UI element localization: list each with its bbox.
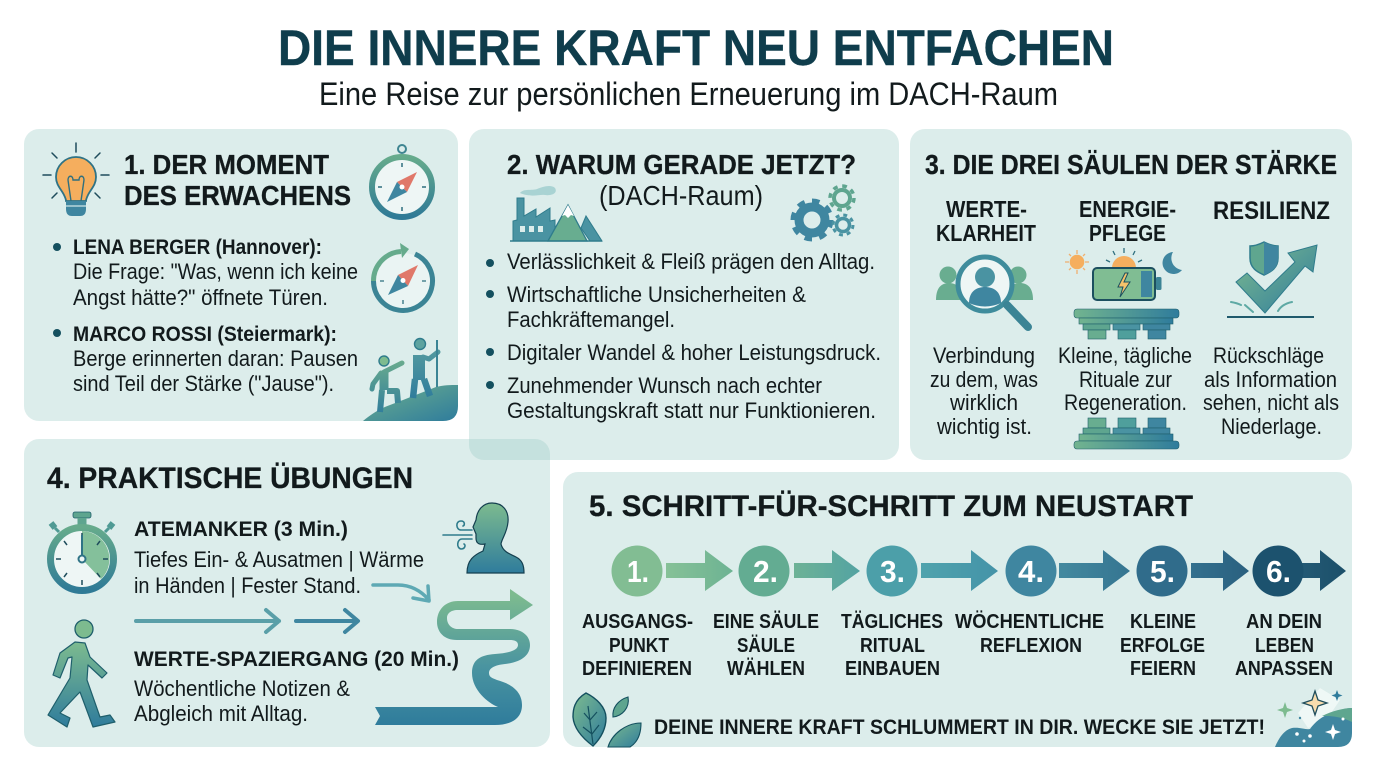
heading 1: DES ERWACHENS [124,180,351,211]
step 4: REFLEXION [980,635,1082,657]
step 5 [1120,546,1205,680]
column: Resilienz: RESILIENZ [1213,197,1330,225]
heading 2: (DACH-Raum) [599,180,763,211]
column: Energie-Pflege [1058,196,1192,449]
step 1: PUNKT [609,635,669,657]
heading 2: 2. WARUM GERADE JETZT? [507,149,856,180]
icon: gears [793,186,854,239]
step 6: 6. [1266,554,1291,589]
bullet list: Gestaltungskraft statt nur Funktionieren. [507,398,876,423]
text: Marco Rossi: MARCO ROSSI (Steiermark): [73,323,337,346]
step 2: WÄHLEN [727,657,805,680]
column: Resilienz [1203,197,1339,439]
heading 1: 1. DER MOMENT [124,149,329,180]
step 2: 2. [753,554,778,589]
panel 5 background [563,472,1352,747]
bullet list: Zunehmender Wunsch nach echter [507,373,822,398]
column: Werte-Klarheit: wirklich [949,390,1018,415]
text: Lena Berger: Angst hätte?" öffnete Türen. [73,285,328,310]
icon: walking person [48,620,115,727]
step 5: ERFOLGE [1120,635,1205,657]
panel 4 background [24,439,550,747]
column: Energie-Pflege: Rituale zur [1079,367,1172,392]
column: Resilienz: sehen, nicht als [1203,390,1339,415]
step 5: FEIERN [1130,658,1196,680]
text: Lena Berger: LENA BERGER (Hannover): [73,236,322,259]
icon: compass with arrow [373,243,432,310]
column: Werte-Klarheit: wichtig ist. [936,414,1032,439]
column: Resilienz: Niederlage. [1221,414,1322,439]
text: Marco Rossi [53,323,358,396]
icon: shield, check and rising arrow [1227,242,1317,317]
bullet list: Digitaler Wandel & hoher Leistungsdruck. [507,340,881,365]
title: DIE INNERE KRAFT NEU ENTFACHEN [278,20,1114,76]
column: Energie-Pflege: PFLEGE [1089,220,1166,246]
step 4: WÖCHENTLICHE [955,610,1104,633]
icon: compass [372,145,432,217]
heading 5: 5. SCHRITT-FÜR-SCHRITT ZUM NEUSTART [589,490,1193,523]
panel: 4 Praktische Übungen [24,439,550,747]
column: Energie-Pflege: Kleine, tägliche [1058,343,1192,368]
icon: hikers on a hill [363,338,458,421]
step 2 [713,546,819,680]
column: Werte-Klarheit: WERTE- [946,196,1027,222]
bullet list [486,249,881,423]
subtitle: Eine Reise zur persönlichen Erneuerung im DACH-Raum [319,76,1058,112]
text: Lena Berger [53,236,358,310]
column: Werte-Klarheit: KLARHEIT [936,220,1036,246]
column: Energie-Pflege: Regeneration. [1064,390,1187,415]
icon: battery with sun and moon [1065,248,1182,300]
column: Werte-Klarheit [930,196,1038,439]
icon: pillar capital [1074,309,1179,339]
text: Lena Berger: Die Frage: "Was, wenn ich keine [73,259,358,284]
heading 4: 4. PRAKTISCHE ÜBUNGEN [47,462,413,495]
icon: factory and mountains [510,186,602,241]
arrow: two straight arrows [136,610,358,632]
step 1 [582,546,693,680]
panel: 3 Die drei Säulen der Stärke [910,129,1352,460]
text: Atemanker: Tiefes Ein- & Ausatmen | Wärme [134,547,424,572]
icon: light bulb [43,143,109,216]
bullet list: Fachkräftemangel. [507,307,675,332]
text: Atemanker: in Händen | Fester Stand. [134,573,361,598]
step 3: EINBAUEN [845,658,940,680]
step 5: KLEINE [1130,611,1196,633]
icon: leaves [573,693,641,747]
icon: magnifier with people [936,257,1033,327]
column: Resilienz: als Information [1204,367,1337,392]
bullet list: Verlässlichkeit & Fleiß prägen den Alltag. [507,249,875,274]
column: Werte-Klarheit: Verbindung [933,343,1035,368]
icon: stopwatch [50,512,114,590]
panel 3 background [910,129,1352,460]
text: Atemanker: ATEMANKER (3 Min.) [134,518,348,541]
text: Atemanker [134,518,424,598]
column: Werte-Klarheit: zu dem, was [930,367,1038,392]
icon: person breathing [443,503,524,573]
step 2: SÄULE [737,634,795,657]
arrow: winding road [375,589,533,725]
step 3: 3. [880,554,905,589]
step 6: LEBEN [1255,635,1314,657]
step 3: TÄGLICHES [841,610,943,633]
step 1: AUSGANGS- [582,611,693,633]
text: Werte-Spaziergang: Abgleich mit Alltag. [134,701,308,726]
step 4 [955,546,1104,657]
panel: 5 Schritt-für-Schritt zum Neustart [563,472,1352,747]
icon: sparkles [1275,688,1352,747]
step 1: 1. [627,554,649,589]
text: Marco Rossi: sind Teil der Stärke ("Jause"). [73,371,334,396]
text: Werte-Spaziergang: WERTE-SPAZIERGANG (20 Min.) [134,648,459,671]
panel: 2 Warum gerade jetzt [469,129,899,460]
panel 1 background [24,129,458,421]
icon: pillar base [1074,418,1179,449]
arrow: curved to path [373,585,429,601]
text: Marco Rossi: Berge erinnerten daran: Pausen [73,346,358,371]
heading 2 [507,149,856,211]
step 3: RITUAL [860,635,925,657]
text: Werte-Spaziergang: Wöchentliche Notizen & [134,676,350,701]
column: Resilienz: Rückschläge [1213,343,1324,368]
heading 1 [124,149,351,211]
step 6: AN DEIN [1246,611,1322,633]
step 2: EINE SÄULE [713,610,819,633]
bullet list: Wirtschaftliche Unsicherheiten & [507,282,806,307]
closing statement: DEINE INNERE KRAFT SCHLUMMERT IN DIR. WECKE SIE JETZT! [654,716,1265,739]
step 6 [1235,546,1333,680]
step 1: DEFINIEREN [582,658,692,680]
step 6: ANPASSEN [1235,658,1333,680]
step arrows [666,550,1346,591]
step 5: 5. [1150,554,1175,589]
column: Energie-Pflege: ENERGIE- [1079,196,1176,222]
text: Werte-Spaziergang [134,648,459,726]
step 3 [841,546,943,680]
panel 2 background [469,129,899,460]
panel: 1 Der Moment des Erwachens [24,129,458,421]
step 4: 4. [1018,554,1044,589]
